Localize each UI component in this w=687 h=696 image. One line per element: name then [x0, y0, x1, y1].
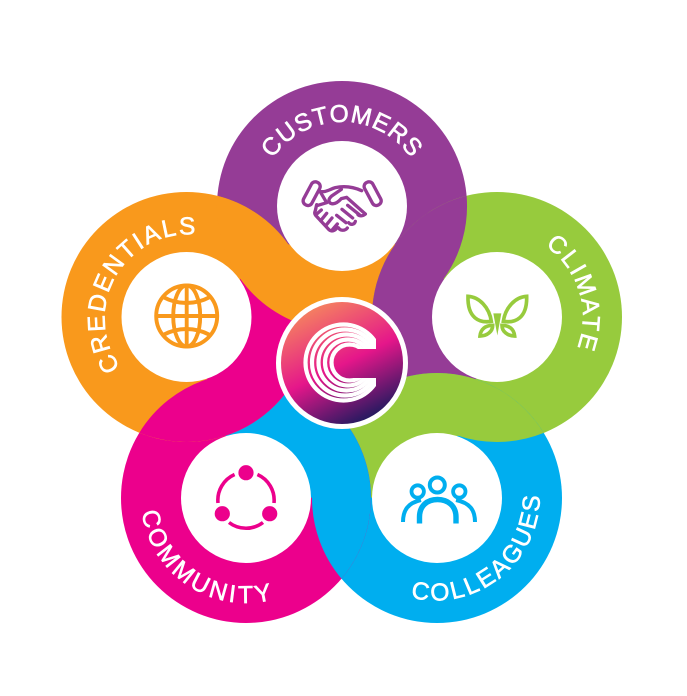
logo ring — [278, 300, 406, 426]
icon: globe — [156, 285, 217, 347]
logo mark: striped C — [305, 324, 382, 400]
heading: customers: CUSTOMERS — [262, 104, 422, 156]
heading: credentials: CREDENTIALS — [87, 216, 194, 372]
panel: credentials — [87, 216, 252, 382]
swirl tail: climate green — [342, 373, 544, 498]
panel: colleagues — [372, 433, 540, 601]
interlocking coloured rings — [62, 81, 622, 623]
disc: customers — [217, 81, 467, 331]
white hub: customers — [277, 141, 407, 271]
panel: customers — [262, 104, 422, 271]
five-petal diagram — [62, 81, 622, 623]
icon: group of people — [403, 478, 475, 524]
panel: community — [142, 433, 311, 604]
swirl tail: colleagues blue — [226, 382, 371, 579]
swirl tail: community pink — [139, 279, 311, 442]
disc: credentials — [62, 192, 312, 442]
disc: community — [121, 373, 371, 623]
disc: colleagues — [312, 373, 562, 623]
icon: butterfly — [468, 296, 527, 336]
white hub: credentials — [122, 252, 252, 382]
white hub: community — [181, 433, 311, 563]
white hub: colleagues — [372, 433, 502, 563]
swirl tail: customers purple — [372, 196, 476, 382]
icon: handshake — [302, 180, 383, 231]
heading: community: COMMUNITY — [142, 510, 270, 604]
heading: climate: CLIMATE — [549, 236, 600, 352]
disc: climate — [372, 192, 622, 442]
heading: colleagues: COLLEAGUES — [412, 496, 540, 601]
swirl tail: credentials orange — [217, 196, 395, 331]
panel: climate — [432, 236, 600, 382]
icon: connected circle — [215, 465, 277, 528]
central logo — [278, 300, 406, 426]
white hub: climate — [432, 252, 562, 382]
